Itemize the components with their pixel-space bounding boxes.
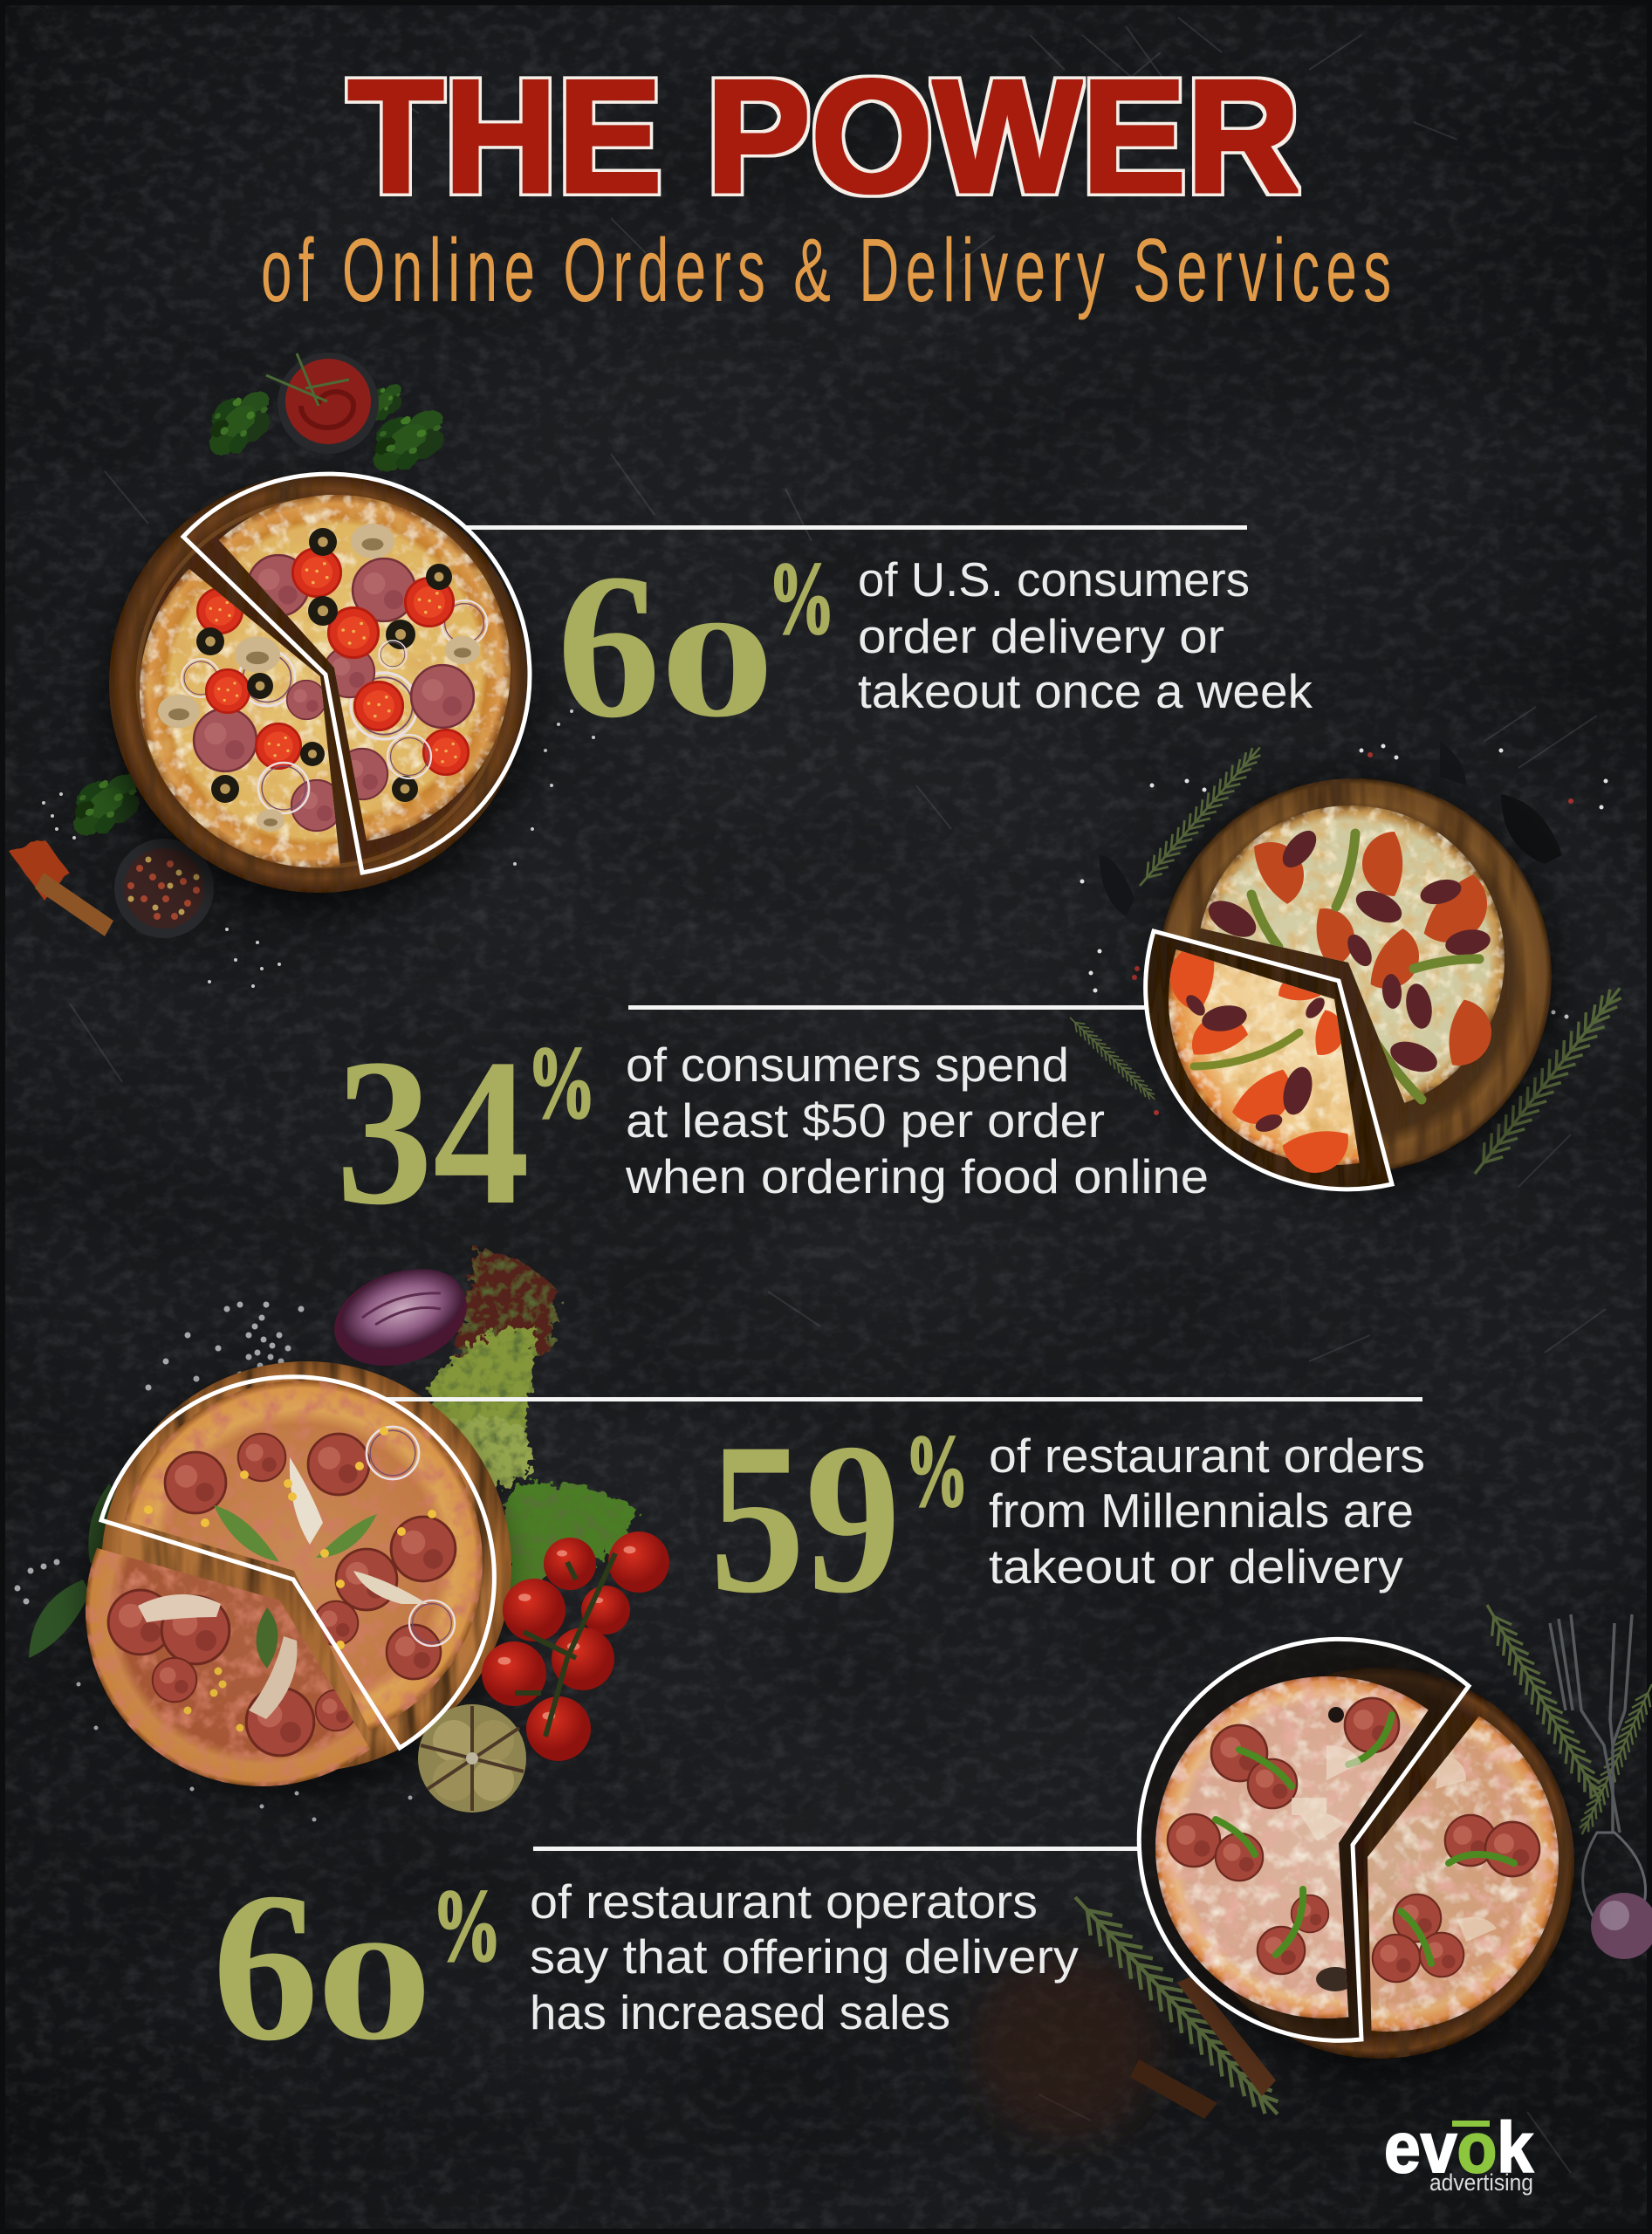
stat 4 description: of restaurant operators — [530, 1874, 1038, 1929]
pizza 2: wooden board — [1155, 778, 1559, 1189]
pizza 2: pulled-out slice — [1148, 934, 1389, 1187]
stat 2 — [336, 1016, 1209, 1249]
stat 1 description: takeout once a week — [858, 664, 1313, 718]
pizza 4: large slice — [1155, 1676, 1429, 2018]
pizza 1: large slice — [218, 495, 511, 841]
stat 4 number: 6 — [212, 1848, 319, 2085]
stat 4 number: 0 — [316, 1910, 433, 2070]
stat 2 description: of consumers spend — [626, 1038, 1069, 1092]
stat 1 description: order delivery or — [858, 609, 1224, 663]
pizza 4: wooden board — [1180, 1668, 1578, 2075]
stat 3 percent sign: % — [905, 1414, 969, 1528]
stat 3 connector line — [385, 1397, 1422, 1401]
stat 4 percent sign: % — [432, 1868, 502, 1983]
stat 3 description — [989, 1429, 1425, 1593]
pizza 3: wooden board — [87, 1361, 511, 1798]
stat 1 number: 6 — [557, 531, 661, 761]
pizza 1: pie outline — [183, 474, 530, 873]
stat 2 percent sign: % — [527, 1025, 596, 1140]
pizza 1: wooden board — [105, 474, 532, 912]
stat 3 description: from Millennials are — [989, 1484, 1414, 1538]
stat 1 number: 0 — [660, 591, 775, 746]
pizza 4: dark pie backing — [1139, 1639, 1469, 2040]
food garnish: ketchup bowl and parsley — [211, 353, 461, 483]
pizza 4: pie outline — [1139, 1639, 1469, 2040]
pizza 3: pie outline — [101, 1377, 494, 1748]
stat 2 description: when ordering food online — [625, 1149, 1209, 1203]
pizza 3: small slice — [86, 1548, 370, 1786]
pizza 3: large slice — [120, 1381, 483, 1744]
title: THE POWER — [347, 45, 1300, 225]
food garnish: parsley, spices and pepper bowl — [9, 711, 593, 986]
stat 4 description: say that offering delivery — [530, 1929, 1080, 1984]
logo: evok advertising — [1384, 2108, 1533, 2196]
stat 1 — [557, 531, 1313, 761]
stat 1 percent sign: % — [768, 541, 835, 655]
food garnish: herbs and peppercorns around pizza 2 — [1066, 742, 1629, 1181]
stat 2 description: at least $50 per order — [626, 1093, 1105, 1148]
stat 2 connector line — [628, 1005, 1146, 1010]
logo tagline: advertising — [1429, 2169, 1533, 2196]
food garnish: salt, basil, onion and lettuce — [17, 1248, 637, 1658]
food garnish: tomatoes and garlic — [79, 1532, 669, 1819]
stat 4 description: has increased sales — [530, 1985, 950, 2039]
pizza 4: small slice — [1217, 1689, 1559, 2032]
stat 1 description: of U.S. consumers — [858, 552, 1250, 606]
stat 1 description — [858, 552, 1313, 718]
pizza 2: pie outline — [1146, 931, 1392, 1189]
stat 3 — [709, 1398, 1425, 1638]
logo wordmark: evok — [1384, 2108, 1533, 2188]
stat 2 description — [625, 1038, 1209, 1203]
stat 3 description: of restaurant orders — [989, 1429, 1425, 1483]
logo macron bar — [1452, 2121, 1490, 2127]
stat 1 connector line — [464, 525, 1247, 530]
food garnish: rosemary, fork, spices and pestle — [974, 1599, 1652, 2138]
stat 4 — [212, 1848, 1080, 2085]
stat 2 number: 34 — [336, 1016, 530, 1249]
stat 3 number: 59 — [709, 1398, 901, 1638]
pizza 1: small slice — [140, 569, 340, 867]
pizza 2: large slice — [1197, 805, 1505, 1113]
stat 4 description — [530, 1874, 1080, 2039]
stat 4 connector line — [533, 1847, 1140, 1851]
subtitle: of Online Orders & Delivery Services — [261, 220, 1391, 321]
stat 3 description: takeout or delivery — [989, 1539, 1404, 1593]
